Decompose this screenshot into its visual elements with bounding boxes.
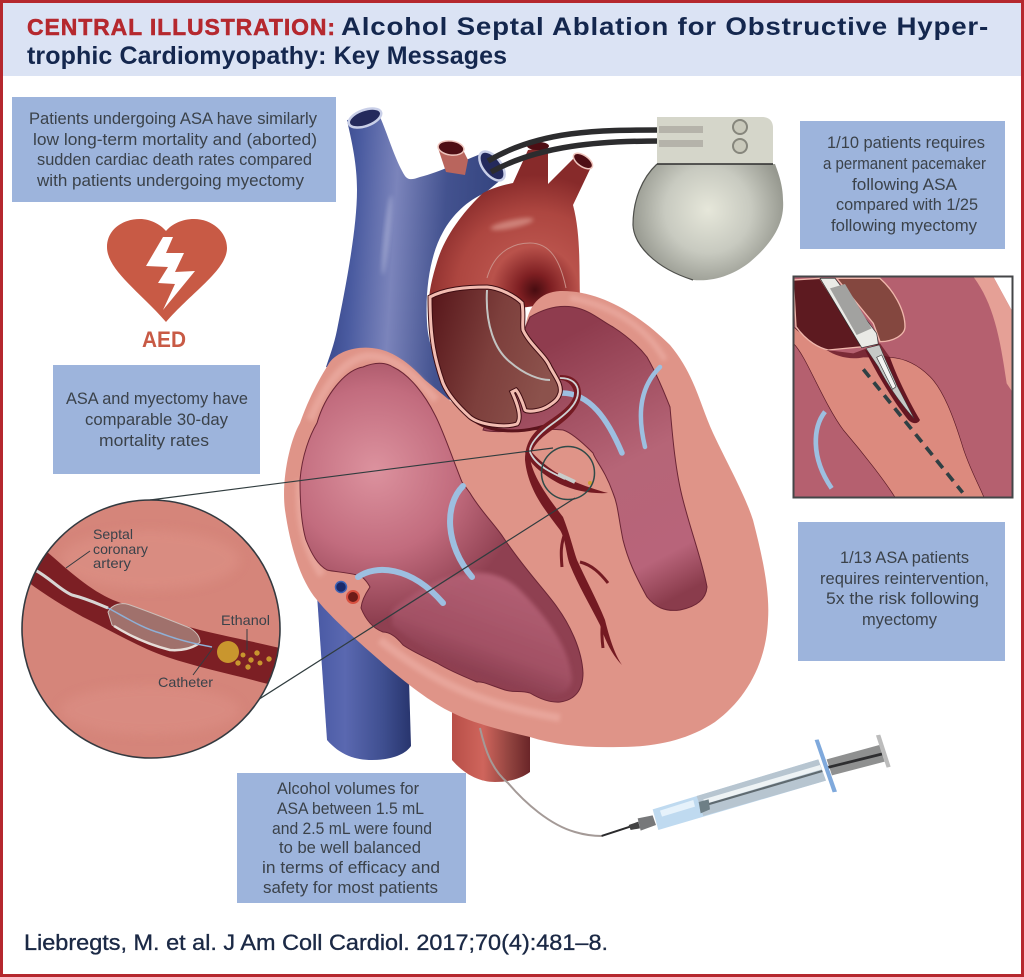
- label: septal coronary artery: coronary: [93, 541, 148, 557]
- label: ethanol: [221, 612, 270, 650]
- label: ethanol: Ethanol: [221, 612, 270, 628]
- catheter wire: [108, 607, 212, 648]
- text box: pacemaker rates: [800, 121, 1005, 249]
- text box: reintervention: 1/13 ASA patients: [840, 549, 969, 567]
- text box: 30-day mortality: [53, 365, 260, 474]
- text box: pacemaker rates: a permanent pacemaker: [823, 155, 986, 173]
- text box: 30-day mortality: mortality rates: [99, 432, 209, 450]
- inset: myectomy scalpel view: [793, 276, 1013, 500]
- ethanol droplets: [217, 641, 272, 670]
- title band: Alcohol Septal Ablation for Obstructive Hyper-: [341, 13, 989, 41]
- text box: alcohol volumes: and 2.5 mL were found: [272, 820, 432, 838]
- text box: pacemaker rates: 1/10 patients requires: [827, 134, 985, 152]
- catheter through artery: [530, 378, 578, 479]
- magnified septal artery view: [22, 500, 280, 758]
- title band: [3, 3, 1021, 76]
- vessel: aorta and arch branches: [429, 139, 595, 320]
- text box: pacemaker rates: compared with 1/25: [836, 196, 978, 214]
- inset: outer wall: [994, 278, 1012, 310]
- citation footer: Liebregts, M. et al. J Am Coll Cardiol. 2017;70(4):481–8.: [24, 930, 608, 955]
- text box: alcohol volumes: safety for most patients: [263, 879, 438, 897]
- inset: scalpel: [866, 345, 914, 418]
- septal coronary artery: [525, 375, 622, 665]
- text box: alcohol volumes: in terms of efficacy and: [262, 859, 440, 877]
- papillary tendons: [358, 367, 660, 603]
- artery band: [28, 550, 280, 684]
- title band: CENTRAL ILLUSTRATION:: [27, 14, 335, 40]
- heart outer wall: [284, 291, 768, 747]
- label: catheter: [158, 648, 213, 690]
- balloon: [108, 604, 200, 650]
- text box: alcohol volumes: ASA between 1.5 mL: [277, 800, 424, 818]
- magnifier circle on heart: [542, 446, 594, 500]
- text box: reintervention: [798, 522, 1005, 661]
- text box: reintervention: myectomy: [862, 611, 938, 629]
- right heart chamber: [483, 306, 707, 610]
- icon: AED heart with lightning bolt: [107, 219, 227, 352]
- text box: mortality and SCD: Patients undergoing ASA have similarly: [29, 110, 318, 128]
- aortic root cutaway valve: [430, 287, 560, 431]
- syringe and tubing: [480, 728, 891, 836]
- label: catheter: Catheter: [158, 674, 213, 690]
- implanted pacemaker: [488, 117, 783, 280]
- text box: 30-day mortality: comparable 30-day: [85, 411, 229, 429]
- label: septal coronary artery: Septal: [93, 526, 133, 542]
- left heart chamber: [300, 363, 583, 702]
- text box: mortality and SCD: sudden cardiac death rates compared: [37, 151, 312, 169]
- text box: pacemaker rates: following ASA: [852, 176, 957, 194]
- text box: mortality and SCD: low long-term mortality and (aborted): [33, 131, 317, 149]
- label: septal coronary artery: [66, 526, 148, 571]
- inset: dashed resection line: [863, 369, 963, 493]
- text box: alcohol volumes: Alcohol volumes for: [277, 780, 419, 798]
- vessel: descending aorta: [452, 710, 530, 782]
- text box: alcohol volumes: to be well balanced: [279, 839, 421, 857]
- icon: AED heart with lightning bolt: AED: [142, 327, 186, 352]
- label: septal coronary artery: artery: [93, 555, 131, 571]
- vessel: inferior vena cava: [317, 595, 411, 760]
- inset: tendon: [816, 412, 832, 488]
- inset: excision cut: [865, 350, 920, 423]
- text box: 30-day mortality: ASA and myectomy have: [66, 390, 248, 408]
- title band: trophic Cardiomyopathy: Key Messages: [27, 42, 507, 70]
- text box: reintervention: 5x the risk following: [826, 590, 979, 608]
- text box: reintervention: requires reintervention,: [820, 570, 989, 588]
- pacemaker leads: [488, 130, 660, 172]
- small vessels in wall: [336, 582, 359, 603]
- callout lines to magnified view: [150, 448, 575, 703]
- text box: mortality and SCD: [12, 97, 336, 202]
- text box: mortality and SCD: with patients undergoing myectomy: [36, 172, 305, 190]
- catheter guide wire in root: [487, 290, 550, 380]
- text box: pacemaker rates: following myectomy: [831, 217, 978, 235]
- text box: alcohol volumes: [237, 773, 466, 903]
- vessel: superior vena cava and branch: [326, 105, 510, 400]
